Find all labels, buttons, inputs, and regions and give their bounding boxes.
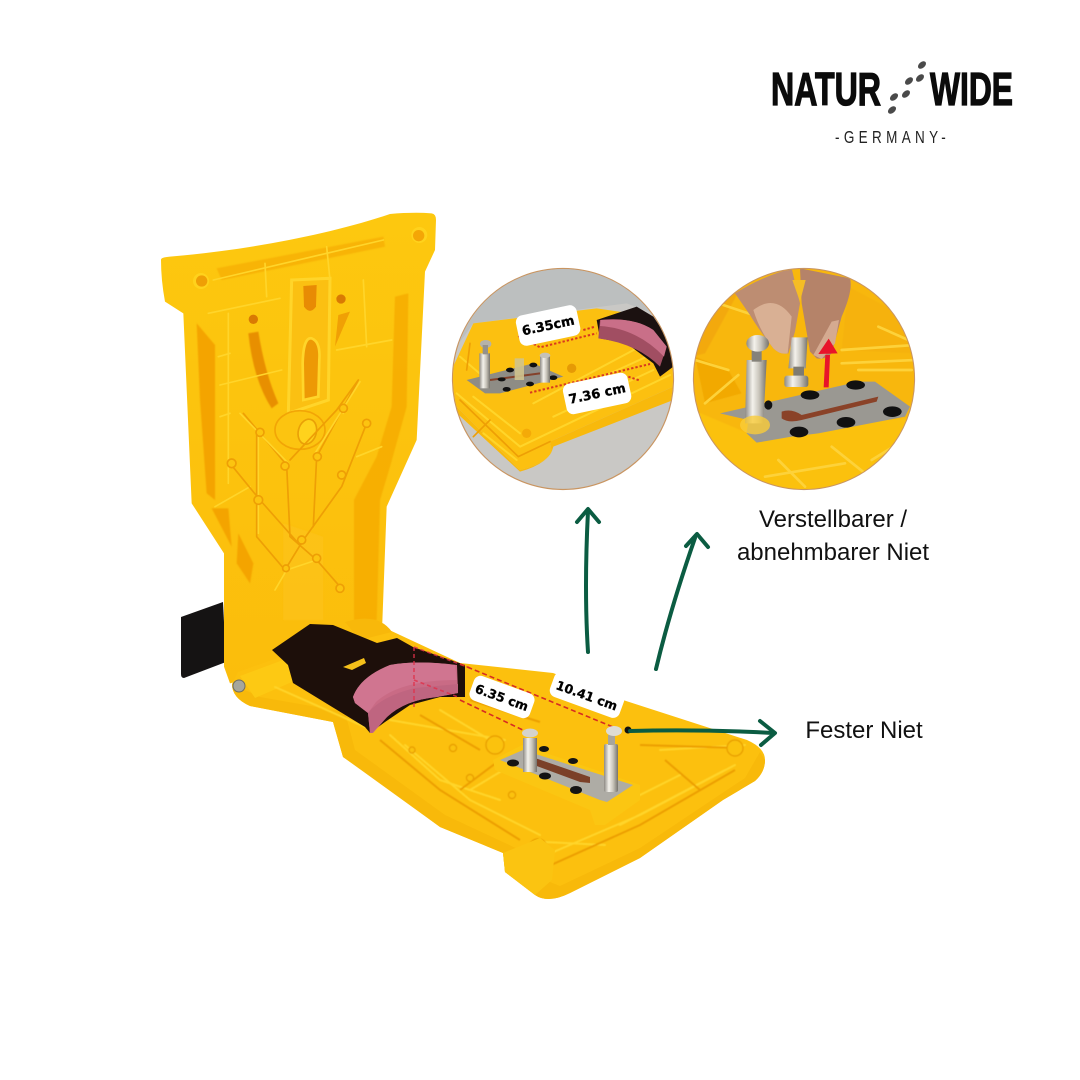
caption: Verstellbarer / abnehmbarer Niet: abnehmbarer Niet xyxy=(737,539,929,566)
inset backdrop xyxy=(458,269,650,344)
holder window xyxy=(343,658,366,670)
bottom tab xyxy=(503,838,555,895)
product: chain sharpener xyxy=(161,213,765,899)
inset red arrow xyxy=(818,339,838,387)
caption: Verstellbarer / abnehmbarer Niet xyxy=(737,506,929,566)
pivot ring xyxy=(275,411,325,449)
logo: Natur Wide Germany xyxy=(771,60,1013,148)
inset metal plate xyxy=(720,382,910,443)
inset ribs xyxy=(457,347,670,460)
hinge bar xyxy=(240,660,292,698)
raised plate mount xyxy=(493,745,640,825)
base plate xyxy=(232,619,765,899)
inset label: 7.36 cm xyxy=(562,371,633,416)
corner bosses xyxy=(193,273,209,289)
caption: Fester Niet: Fester Niet xyxy=(805,717,923,744)
label: 10.41 cm xyxy=(548,670,626,720)
inset dark holder xyxy=(597,307,673,377)
inset pink stone xyxy=(598,319,667,367)
dark sharpening stone holder xyxy=(272,624,465,733)
circle inset: removable rivet xyxy=(692,268,916,490)
inset fingers xyxy=(735,268,800,354)
caption: Verstellbarer / abnehmbarer Niet: Verstellbarer / xyxy=(759,506,907,533)
metal plate with screws xyxy=(500,746,633,802)
label: 6.35 cm xyxy=(467,674,537,720)
arrow: up to dimensions inset xyxy=(577,509,599,652)
label: 10.41 cm: 10.41 cm xyxy=(554,677,620,714)
arrow: to fixed rivet label xyxy=(624,721,775,745)
inset yellow plate xyxy=(450,308,673,470)
inset label: 7.36 cm: 7.36 cm xyxy=(567,381,627,408)
center clip with slots xyxy=(288,278,330,413)
upright yellow panel xyxy=(161,213,436,683)
inset fixed pin xyxy=(745,360,767,423)
inset metal plate xyxy=(467,363,563,393)
inset blurred rib background xyxy=(694,269,914,489)
dashed measure lines xyxy=(460,664,613,732)
inset dotted guides xyxy=(518,327,650,393)
inset pins xyxy=(479,353,490,388)
circle inset: dimensions xyxy=(440,260,680,490)
pink grinding stone xyxy=(353,662,458,733)
arrow: up to removable rivet inset xyxy=(656,534,708,669)
ribs on base xyxy=(275,687,745,870)
inset removable rivet xyxy=(788,337,808,368)
black plate behind the hinge xyxy=(181,602,226,678)
logo icon: coffee bean trail xyxy=(887,60,927,115)
inset label: 6.35cm xyxy=(515,304,582,347)
pin: adjustable rivet xyxy=(522,728,538,772)
label: 6.35 cm: 6.35 cm xyxy=(473,681,531,714)
inset label: 6.35cm: 6.35cm xyxy=(521,314,576,339)
logo subline: GERMANY: -GERMANY- xyxy=(835,128,950,148)
logo wordmark: NATUR: NATUR xyxy=(771,63,881,115)
ribs xyxy=(208,240,392,507)
hinge bolt xyxy=(233,680,245,692)
red dashed guide lines on stone xyxy=(414,647,470,708)
pin: fixed rivet xyxy=(604,726,622,792)
logo wordmark: WIDE: WIDE xyxy=(930,63,1013,115)
